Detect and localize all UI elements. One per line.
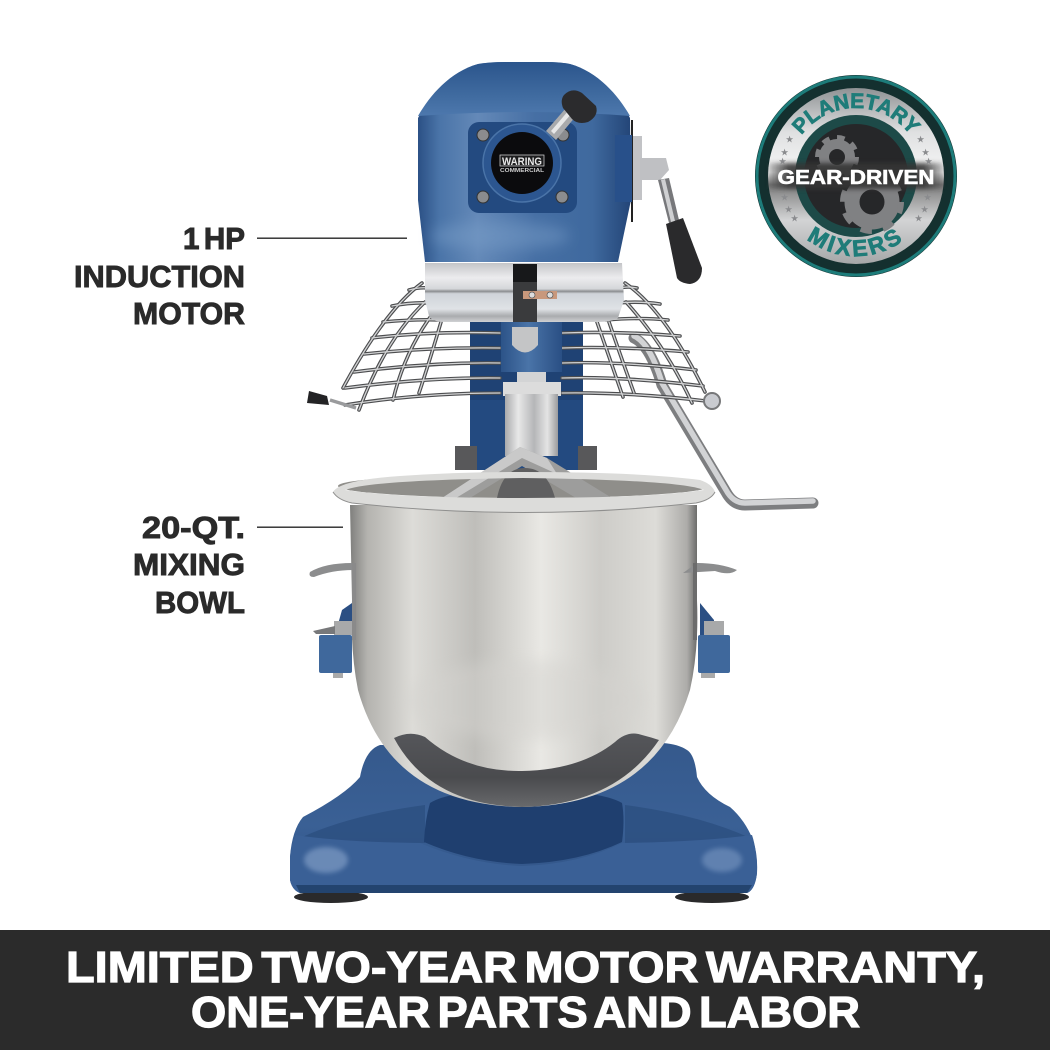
banner text xyxy=(66,943,985,1037)
badge stars: ★ xyxy=(785,205,793,214)
badge stars: ★ xyxy=(915,214,923,223)
callout line: motor xyxy=(257,238,407,239)
badge: planetary gear-driven mixers: PLANETARY xyxy=(791,93,922,134)
bowl rim xyxy=(333,472,715,512)
callout: 1 HP induction motor: INDUCTION xyxy=(74,260,245,294)
badge stars: ★ xyxy=(779,157,787,166)
speed knob xyxy=(546,90,597,140)
motor head xyxy=(418,62,632,262)
base xyxy=(290,743,757,903)
bowl xyxy=(333,472,715,807)
logo plate: WARING xyxy=(502,156,542,168)
chrome ring xyxy=(425,263,624,322)
column xyxy=(455,320,597,470)
logo plate: COMMERCIAL xyxy=(500,168,545,174)
callout: 1 HP induction motor: 1 HP xyxy=(183,222,245,256)
motor lever xyxy=(631,120,702,284)
badge: planetary gear-driven mixers xyxy=(755,75,957,277)
callout: 20-qt. mixing bowl: 20-QT. xyxy=(142,511,245,545)
badge stars: ★ xyxy=(921,205,929,214)
callout: 1 HP induction motor: MOTOR xyxy=(133,297,245,331)
callout: 20-qt. mixing bowl: MIXING xyxy=(133,548,245,582)
splash guard wire cage xyxy=(307,283,720,410)
beater xyxy=(442,447,612,498)
badge stars: ★ xyxy=(786,135,794,144)
gear icons xyxy=(818,138,901,231)
callout line: bowl xyxy=(257,526,343,528)
callout: 20-qt. mixing bowl: BOWL xyxy=(155,586,245,620)
banner text: LIMITED TWO-YEAR MOTOR WARRANTY, xyxy=(66,943,985,992)
bowl interior xyxy=(338,474,710,498)
callout: 20-qt. mixing bowl xyxy=(133,511,245,620)
bowl clips xyxy=(310,563,737,678)
bottom banner xyxy=(0,930,1050,1050)
badge stars: ★ xyxy=(925,157,933,166)
badge stars: ★ xyxy=(924,193,932,202)
badge: planetary gear-driven mixers: MIXERS xyxy=(807,226,901,257)
badge stars: ★ xyxy=(781,193,789,202)
badge stars: ★ xyxy=(781,148,789,157)
badge stars xyxy=(779,135,933,223)
badge text: GEAR-DRIVEN xyxy=(778,167,934,189)
badge stars: ★ xyxy=(917,135,925,144)
bowl bottom reflection xyxy=(394,734,659,807)
base recess xyxy=(424,790,624,864)
banner text: ONE-YEAR PARTS AND LABOR xyxy=(191,988,860,1037)
callout: 1 HP induction motor xyxy=(74,222,245,331)
badge stars: ★ xyxy=(791,214,799,223)
neck and shaft xyxy=(501,322,562,456)
bowl lift handle xyxy=(634,336,813,505)
badge band xyxy=(768,163,944,189)
badge stars: ★ xyxy=(922,148,930,157)
logo plate xyxy=(468,122,577,213)
mixer product illustration xyxy=(290,62,813,903)
